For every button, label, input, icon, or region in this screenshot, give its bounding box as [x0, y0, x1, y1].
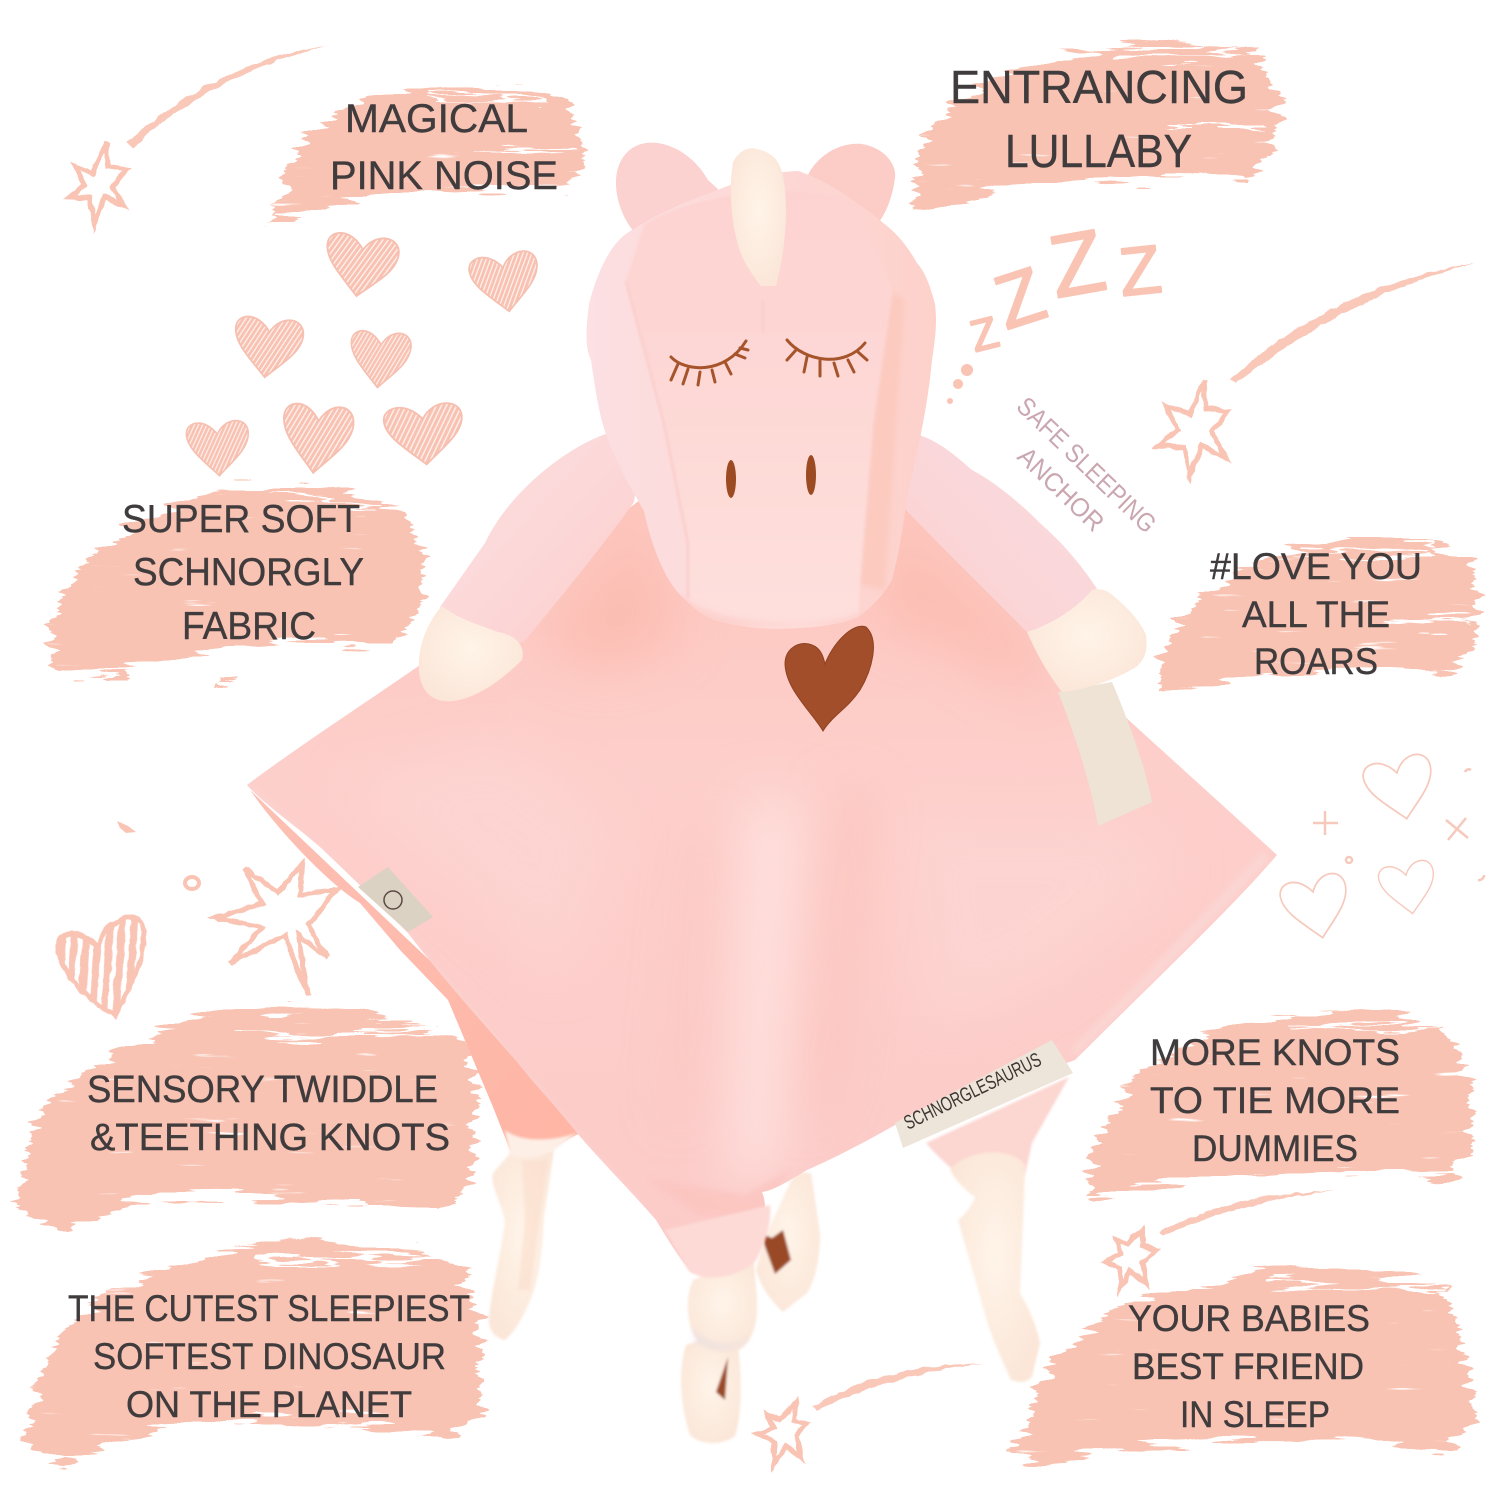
eye left [671, 341, 748, 385]
sleeping z letters: Z [1116, 231, 1165, 311]
knot: left tail [489, 1150, 554, 1340]
right arm with ribbon loop [902, 432, 1152, 826]
text: super soft schnorgly fabric [122, 498, 364, 648]
text: sensory twiddle and teething knots [87, 1069, 450, 1159]
text: sensory twiddle and teething knots: &TEETHING KNOTS [90, 1117, 450, 1159]
text: magical pink noise: PINK NOISE [330, 154, 558, 198]
text: magical pink noise [330, 97, 558, 198]
brush stroke: more knots [1088, 1013, 1472, 1198]
blanket [247, 500, 1277, 1273]
sleeping z letters: Z [966, 308, 1004, 362]
shooting star bottom [758, 1364, 985, 1464]
text: more knots to tie more dummies: MORE KNOTS [1150, 1032, 1400, 1073]
knot: rear tail [756, 1172, 820, 1312]
text: your babies best friend in sleep: BEST FRIEND [1132, 1346, 1364, 1387]
head [580, 143, 945, 635]
blanket underside left [250, 790, 580, 1150]
eye right [787, 340, 867, 376]
side tag [358, 867, 433, 932]
brush stroke: magical pink noise [272, 83, 585, 222]
text: super soft schnorgly fabric: SUPER SOFT [122, 498, 360, 541]
brush stroke: your babies [1010, 1268, 1475, 1464]
text: cutest sleepiest softest dinosaur: SOFTEST DINOSAUR [93, 1336, 446, 1377]
sleeping z letters: Z [985, 251, 1055, 346]
text: more knots to tie more dummies [1150, 1032, 1400, 1169]
embroidered heart [785, 626, 873, 731]
text: love you all the roars: ALL THE [1242, 594, 1390, 635]
burst star and scribble heart left [56, 821, 336, 1020]
plush unicorn comforter [247, 143, 1277, 1443]
text: cutest sleepiest softest dinosaur [68, 1288, 470, 1425]
text: magical pink noise: MAGICAL [345, 97, 528, 141]
brand tag: SCHNORGLESAURUS [901, 1049, 1045, 1134]
text: your babies best friend in sleep: YOUR BABIES [1128, 1298, 1370, 1339]
nostrils [726, 455, 816, 498]
text: entrancing lullaby: ENTRANCING [950, 61, 1248, 113]
text: love you all the roars [1210, 546, 1422, 682]
scribbled hearts cluster [186, 231, 543, 477]
brush stroke: cutest sleepiest [22, 1240, 480, 1464]
shooting star right [1158, 263, 1475, 476]
knot: right tail [926, 1077, 1069, 1382]
outlined hearts right [1278, 752, 1484, 945]
brush stroke: sensory twiddle [15, 1009, 478, 1232]
brush stroke: love you [1160, 538, 1480, 692]
knot: bottom tail [665, 1205, 770, 1443]
text: your babies best friend in sleep: IN SLEEP [1180, 1394, 1330, 1435]
text: more knots to tie more dummies: TO TIE MORE [1150, 1080, 1400, 1121]
shooting star lower right [1106, 1190, 1335, 1288]
text: more knots to tie more dummies: DUMMIES [1192, 1128, 1358, 1169]
text: entrancing lullaby [950, 61, 1248, 177]
text: cutest sleepiest softest dinosaur: ON THE PLANET [126, 1384, 412, 1425]
knot band left [505, 1130, 577, 1158]
horn [731, 148, 786, 286]
text: your babies best friend in sleep [1128, 1298, 1370, 1435]
text: sensory twiddle and teething knots: SENSORY TWIDDLE [87, 1069, 438, 1111]
sleeping z letters: Z [1042, 210, 1112, 317]
brand tag [895, 1040, 1073, 1148]
safe sleeping anchor label: ANCHOR [1012, 441, 1110, 537]
left arm [419, 433, 640, 701]
brush stroke: super soft [51, 486, 425, 682]
text: super soft schnorgly fabric: FABRIC [182, 605, 316, 648]
brush stroke: entrancing lullaby [912, 43, 1280, 212]
text: super soft schnorgly fabric: SCHNORGLY [133, 551, 364, 594]
safe sleeping anchor label: SAFE SLEEPING [1011, 391, 1163, 539]
text: cutest sleepiest softest dinosaur: THE CUTEST SLEEPIEST [68, 1288, 470, 1329]
text: love you all the roars: #LOVE YOU [1210, 546, 1422, 587]
sleeping z letters [947, 210, 1165, 404]
text: love you all the roars: ROARS [1254, 641, 1378, 682]
shooting star top left [70, 45, 328, 224]
text: entrancing lullaby: LULLABY [1005, 125, 1192, 177]
